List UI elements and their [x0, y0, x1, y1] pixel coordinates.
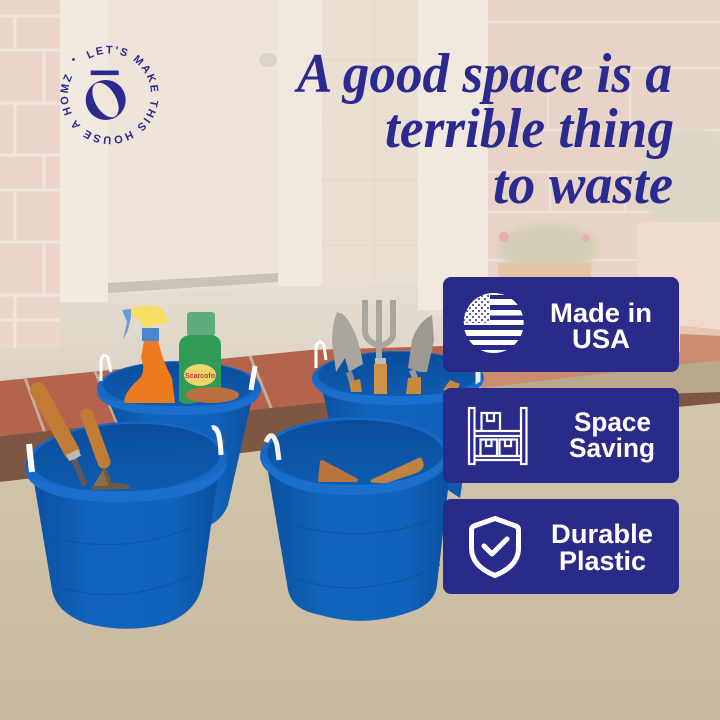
label: Made in — [550, 298, 652, 328]
title: A good space is a — [294, 43, 672, 105]
label: Space — [574, 407, 651, 437]
right brick wall — [488, 0, 720, 300]
rope handles — [101, 355, 111, 381]
icon: storage shelf — [469, 408, 526, 464]
rope handles — [316, 342, 326, 368]
title: to waste — [493, 154, 673, 216]
label: Saving — [569, 433, 655, 463]
porch floor — [0, 284, 720, 440]
trowel left — [332, 312, 363, 392]
back-right bucket with garden tools — [312, 300, 484, 498]
panel: durable plastic — [443, 499, 679, 594]
green can: Scarcofo — [185, 373, 215, 380]
brick step — [0, 326, 720, 482]
plants and planters — [497, 128, 720, 328]
label: Plastic — [559, 546, 646, 576]
front-left bucket with hand tools — [23, 390, 229, 629]
logo badge — [60, 46, 158, 144]
label — [569, 407, 655, 463]
back-left bucket with spray bottle and can — [96, 306, 261, 526]
rope handles — [29, 444, 32, 472]
title: terrible thing — [385, 98, 674, 160]
icon: shield with check — [472, 518, 518, 576]
panel: space saving — [443, 388, 679, 483]
door — [108, 0, 280, 293]
tool with long handle — [38, 390, 85, 485]
rim front — [312, 378, 484, 405]
label — [550, 298, 652, 354]
circular tagline: LET'S MAKE THIS HOUSE A HOMZ — [60, 46, 158, 144]
label: USA — [572, 324, 630, 354]
separator dot — [72, 58, 75, 61]
title — [294, 43, 674, 216]
wooden handles — [320, 459, 422, 482]
handle at right — [443, 380, 460, 392]
rim front — [25, 463, 227, 502]
panel: made in USA — [443, 277, 679, 372]
left brick wall — [0, 0, 60, 348]
garden fork — [365, 300, 393, 394]
rim front — [260, 450, 450, 495]
spray bottle — [122, 306, 175, 403]
icon: american flag globe — [463, 293, 524, 353]
label — [551, 519, 653, 576]
terracotta pot — [185, 387, 239, 403]
macron O mark — [86, 70, 126, 122]
rope handle — [266, 436, 279, 460]
concrete ground — [0, 403, 720, 720]
tool with short handle — [87, 415, 129, 488]
door trim and siding — [60, 0, 488, 310]
green can — [179, 312, 221, 404]
label: Durable — [551, 519, 653, 549]
trowel right — [406, 315, 434, 394]
rim front — [96, 390, 261, 415]
front-right bucket — [260, 417, 452, 621]
